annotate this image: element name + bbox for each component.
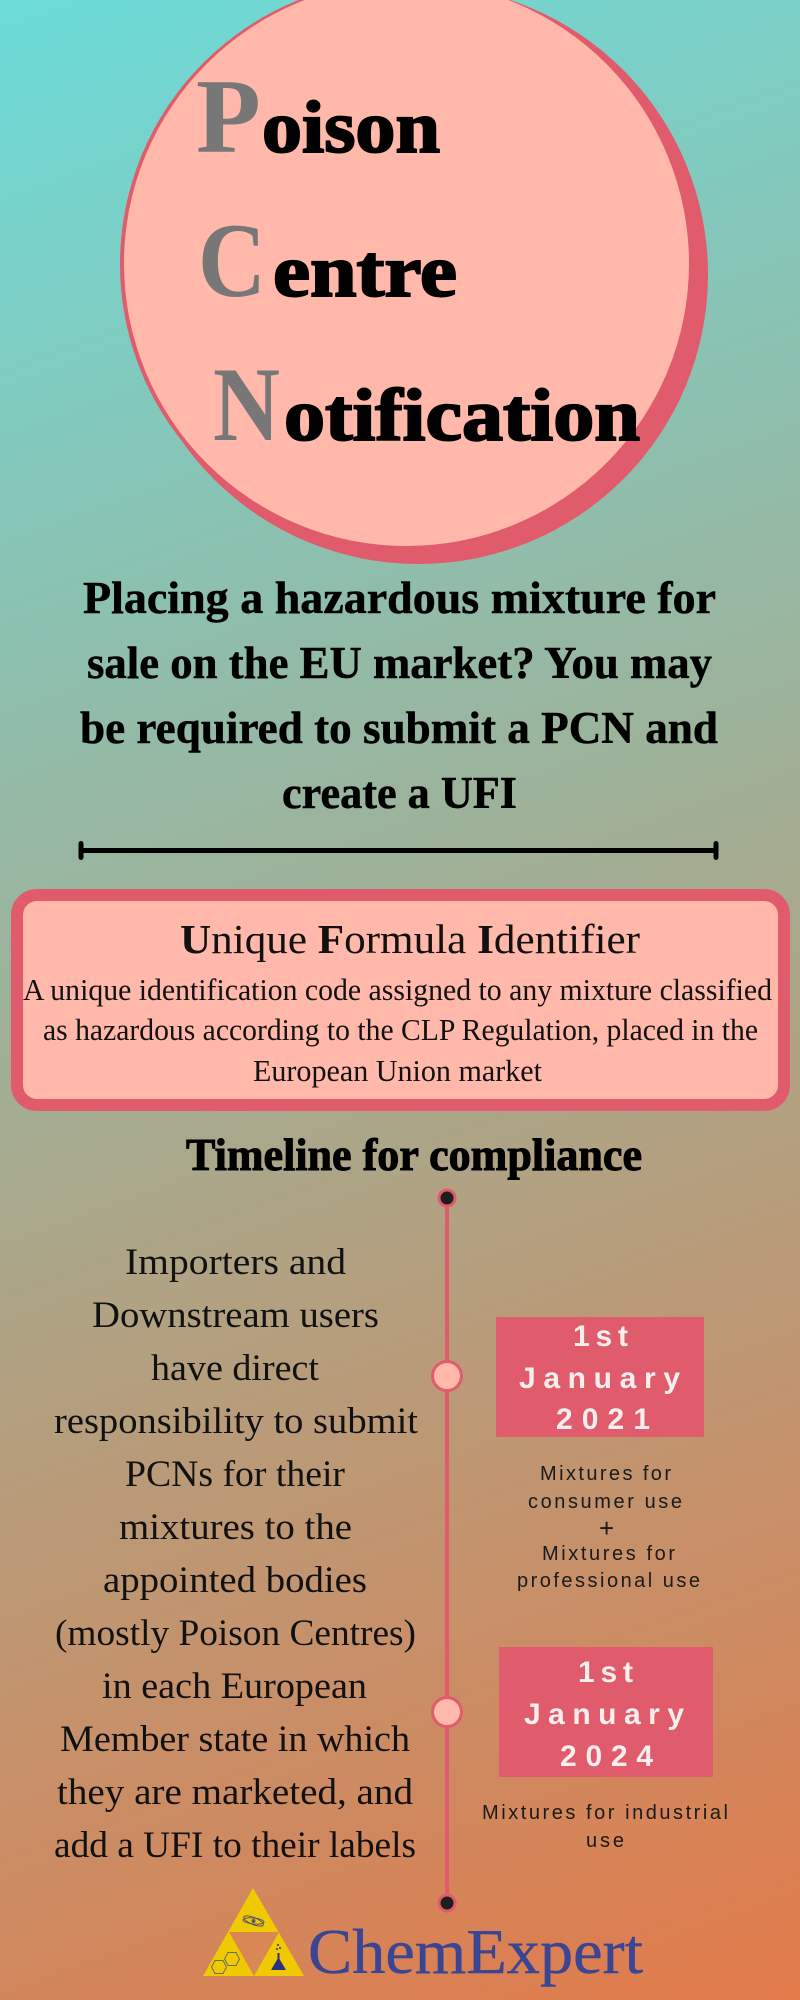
heading: hazardous mixture question: be required to submit a PCN and [80, 703, 718, 753]
date box: 1st January 2024 [499, 1647, 713, 1777]
timeline axis [432, 1190, 462, 1911]
UFI definition: as hazardous according to the CLP Regulation, placed in the [43, 1012, 758, 1047]
icon: hexagon rings [212, 1952, 240, 1974]
timeline node 2021 [432, 1362, 462, 1390]
panel: title circle [120, 0, 708, 564]
title: Poison Centre Notification: C [198, 202, 266, 319]
text block: consumer and professional mixtures: Mixtures for [540, 1463, 671, 1485]
text block: consumer and professional mixtures: Mixtures for [542, 1543, 675, 1565]
title: Poison Centre Notification: entre [273, 231, 457, 313]
text block: importers and downstream users: have direct [151, 1348, 320, 1389]
title: Poison Centre Notification: oison [262, 87, 440, 169]
date box: 1st January 2024: January [524, 1698, 684, 1731]
heading: hazardous mixture question: Placing a hazardous mixture for [83, 573, 716, 623]
text block: importers and downstream users: (mostly Poison Centres) [55, 1613, 416, 1654]
text block: industrial mixtures: use [586, 1830, 624, 1852]
timeline end dot [439, 1895, 455, 1911]
title: Poison Centre Notification [196, 58, 640, 463]
title: Poison Centre Notification: otification [284, 375, 640, 457]
UFI definition: European Union market [253, 1053, 542, 1088]
icon: flask [271, 1944, 286, 1970]
text block: importers and downstream users: in each European [102, 1666, 367, 1707]
heading: timeline for compliance: Timeline for compliance [186, 1130, 642, 1180]
text block: consumer and professional mixtures [517, 1463, 700, 1592]
text block: industrial mixtures [482, 1802, 728, 1852]
title: Poison Centre Notification: P [196, 58, 261, 175]
date box: 1st January 2021 [496, 1317, 704, 1437]
date box: 1st January 2021: 2021 [556, 1403, 650, 1436]
UFI definition [23, 972, 772, 1088]
UFI definition: A unique identification code assigned to any mixture classified [23, 972, 772, 1007]
logo mark: triangle with icons [203, 1888, 304, 1976]
date box: 1st January 2024: 1st [578, 1656, 633, 1689]
logo: ChemExpert [203, 1888, 644, 1987]
text block: consumer and professional mixtures: + [599, 1513, 614, 1543]
text block: importers and downstream users: Downstream users [92, 1295, 379, 1336]
text block: importers and downstream users: add a UFI to their labels [54, 1825, 416, 1866]
text block: importers and downstream users: appointed bodies [103, 1560, 367, 1601]
text block: consumer and professional mixtures: consumer use [528, 1491, 682, 1513]
text block: consumer and professional mixtures: professional use [517, 1570, 700, 1592]
text block: importers and downstream users: Importers and [125, 1242, 347, 1283]
text block: importers and downstream users: responsibility to submit [54, 1401, 419, 1442]
divider with end caps [81, 844, 716, 858]
date box: 1st January 2024: 2024 [560, 1740, 653, 1773]
timeline start dot [439, 1190, 455, 1206]
text block: importers and downstream users: Member state in which [60, 1719, 411, 1760]
date box: 1st January 2021: 1st [573, 1320, 628, 1353]
heading: hazardous mixture question: sale on the EU market? You may [87, 638, 712, 688]
logo wordmark: ChemExpert [308, 1917, 644, 1987]
icon: atom [242, 1914, 265, 1928]
text block: importers and downstream users: they are marketed, and [57, 1772, 414, 1813]
heading: hazardous mixture question [80, 573, 718, 818]
title: Poison Centre Notification: N [213, 346, 280, 463]
timeline node 2024 [432, 1698, 462, 1726]
heading: hazardous mixture question: create a UFI [282, 768, 517, 818]
panel: Unique Formula Identifier [17, 895, 784, 1105]
UFI heading: Unique Formula Identifier [180, 916, 640, 962]
text block: industrial mixtures: Mixtures for industrial [482, 1802, 728, 1824]
text block: importers and downstream users [54, 1242, 419, 1866]
date box: 1st January 2021: January [519, 1362, 680, 1395]
text block: importers and downstream users: PCNs for their [125, 1454, 345, 1495]
text block: importers and downstream users: mixtures to the [119, 1507, 352, 1548]
